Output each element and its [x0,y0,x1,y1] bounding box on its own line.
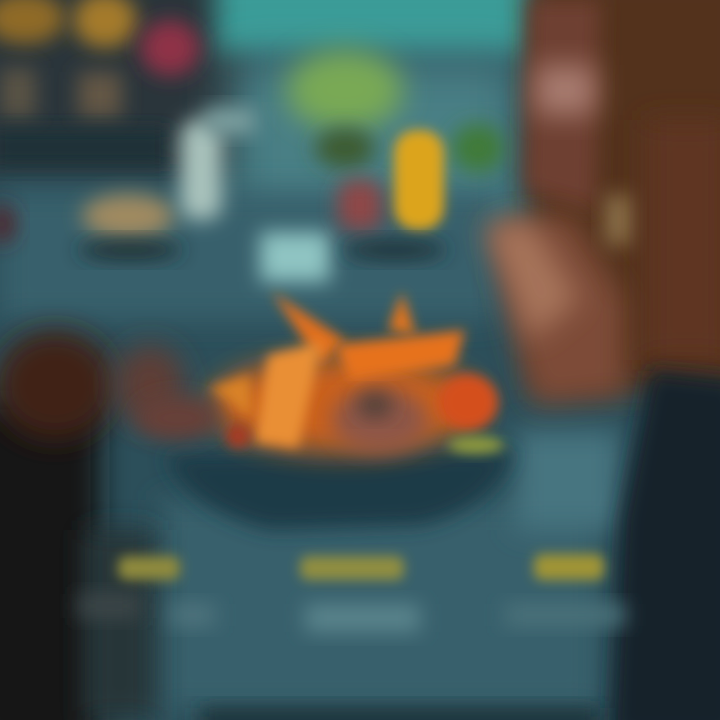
bowl of carrot sticks [136,292,515,530]
green salad and yellow pepper plate [287,50,504,260]
white glass [180,108,255,220]
small plate, left [0,194,182,260]
dark bottom edge [200,708,600,720]
arm, left [0,330,185,720]
top-left shelf with food [0,0,200,164]
dark sleeve, lower right [610,370,720,720]
blurred caption text [78,594,625,632]
blurred yellow headings [118,554,604,580]
hand and arm, right [485,0,720,405]
